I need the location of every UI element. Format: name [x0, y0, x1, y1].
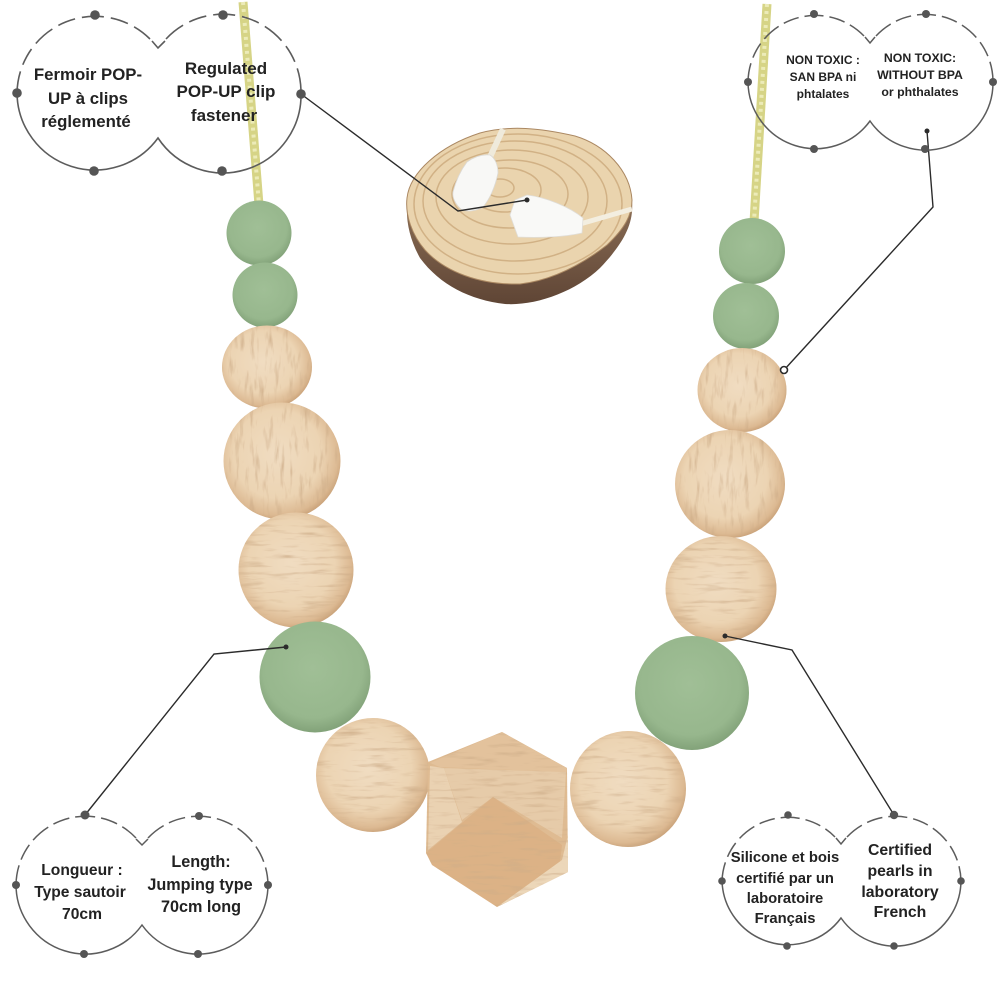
callout: certification leader line	[725, 636, 894, 815]
clip: lower half	[510, 195, 583, 237]
cord on slice	[490, 129, 503, 157]
wood slice growth rings	[414, 134, 622, 274]
bead: green small right 2	[713, 283, 779, 349]
bead: wood left 4	[224, 402, 340, 520]
bead: wood left 3	[222, 326, 312, 408]
badge text: English: pearls in	[868, 863, 932, 880]
badge text: English: Jumping type	[147, 876, 253, 894]
badge text: English: Certified	[868, 842, 932, 859]
bead: wood right 3	[698, 348, 786, 432]
badge outline	[16, 816, 268, 954]
badge text: French: Longueur :	[41, 862, 123, 879]
badge text: French: 70cm	[62, 906, 102, 923]
badge: length	[12, 810, 272, 958]
bead: wood lower right	[570, 731, 686, 847]
badge: clasp fastener	[12, 10, 306, 176]
badge outline	[748, 14, 993, 150]
badge text: French: Silicone et bois	[731, 850, 839, 866]
badge text: English: laboratory	[861, 884, 939, 901]
badge text: French: NON TOXIC :	[786, 53, 860, 67]
badge text: French: Français	[755, 911, 815, 927]
badge dots	[718, 811, 965, 950]
badge text: English: NON TOXIC:	[884, 51, 956, 65]
badge text: French: laboratoire	[747, 891, 823, 907]
badge: non toxic	[744, 10, 997, 153]
badge text: English: POP-UP clip	[177, 82, 275, 101]
badge text: English: WITHOUT BPA	[877, 68, 963, 82]
badge outline	[722, 816, 961, 946]
wood slice top face	[407, 128, 632, 284]
bead: green large left	[260, 622, 370, 732]
callout: clasp leader line	[301, 94, 527, 211]
bead: wooden hexagonal centre	[426, 732, 568, 907]
callout: length leader line	[85, 647, 286, 815]
bead: green large right	[635, 636, 749, 750]
badge text: English: French	[874, 904, 926, 921]
badge text: French: UP à clips	[48, 89, 128, 108]
badge outline	[17, 14, 301, 173]
cord: right strand	[754, 4, 767, 222]
bead: green small left 2	[232, 262, 298, 328]
badge text: French: certifié par un	[736, 871, 834, 887]
badge text: French: phtalates	[797, 87, 850, 101]
necklace beads	[222, 200, 786, 907]
cord: left strand	[243, 2, 259, 205]
wood slice bark side	[407, 128, 632, 304]
bead: wood right 4	[675, 430, 785, 538]
badge text: English: 70cm long	[161, 898, 241, 916]
badge dots	[12, 810, 272, 958]
badge text: English: or phthalates	[881, 85, 959, 99]
badge text: French: Type sautoir	[34, 884, 126, 901]
badge dots	[744, 10, 997, 153]
clasp photo: wood slice with clip fastener	[407, 128, 632, 304]
bead: wood lower left	[316, 718, 430, 832]
bead: green small left 1	[226, 200, 292, 266]
bead: wood left 5	[238, 512, 354, 628]
clip: upper half	[453, 155, 498, 211]
badge text: English: fastener	[191, 106, 257, 125]
badge dots	[12, 10, 306, 176]
badge text: English: Regulated	[185, 59, 267, 78]
leader line end dots	[284, 128, 930, 650]
bead: green small right 1	[719, 218, 785, 284]
bead: wood right 5	[666, 536, 776, 642]
badge text: French: Fermoir POP-	[34, 65, 142, 84]
badge text: English: Length:	[171, 853, 231, 871]
callout: non-toxic leader line	[784, 131, 933, 370]
badge: certification	[718, 811, 965, 950]
badge text: French: SAN BPA ni	[790, 70, 856, 84]
badge text: French: réglementé	[41, 112, 131, 131]
